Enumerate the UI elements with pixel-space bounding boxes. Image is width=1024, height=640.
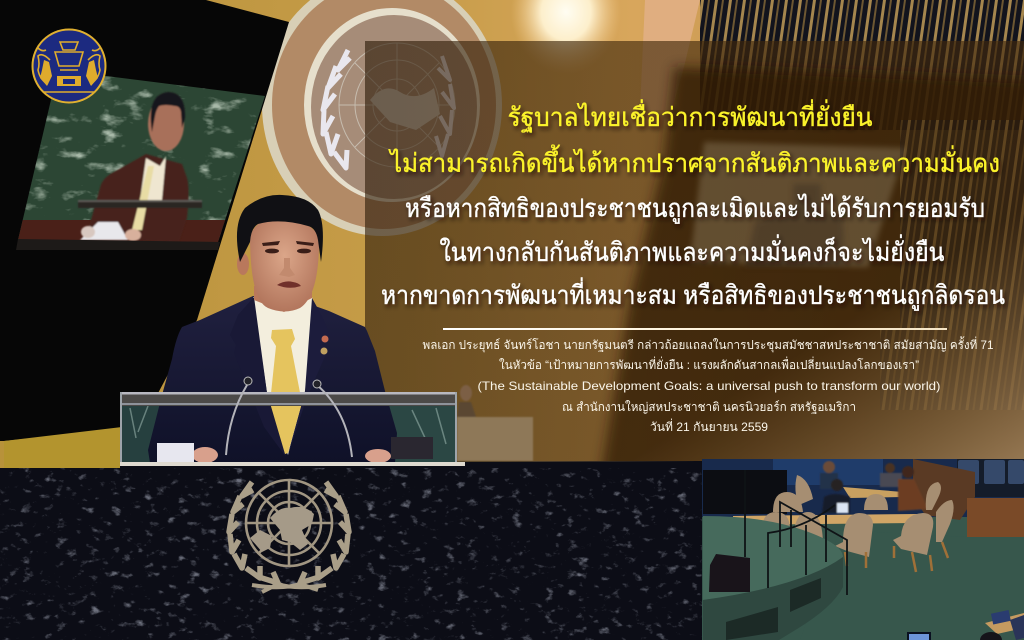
left laurel leaves xyxy=(323,50,350,168)
detail line 3: (The Sustainable Development Goals: a universal push to transform our world) xyxy=(478,379,940,393)
title line 4: ในทางกลับกันสันติภาพและความมั่นคงก็จะไม่ยั่งยืน xyxy=(440,234,945,267)
left lapel xyxy=(230,297,286,457)
rail highlight xyxy=(120,392,457,394)
microphones xyxy=(226,385,352,457)
hands xyxy=(192,447,218,463)
divider rule xyxy=(443,328,947,330)
detail text block xyxy=(422,336,994,434)
wreath stems xyxy=(252,584,326,592)
chairs front row xyxy=(762,500,954,557)
ear xyxy=(237,253,249,275)
platform side xyxy=(703,557,843,640)
lectern glass behind speaker xyxy=(121,404,456,463)
on-screen speaker xyxy=(78,92,202,242)
main table xyxy=(733,514,917,525)
main speaker xyxy=(148,195,397,463)
wooden partition xyxy=(913,459,975,520)
pilaster xyxy=(640,0,700,110)
neck xyxy=(254,286,312,312)
emblem: UN on lectern xyxy=(229,480,349,592)
reflected figure xyxy=(745,184,845,267)
tie xyxy=(270,329,302,454)
emblem: UN relief on wall xyxy=(262,0,502,236)
delegates xyxy=(820,461,928,511)
vents on platform xyxy=(726,607,778,640)
dark inset hall box xyxy=(600,67,1024,480)
lower gold wall strip xyxy=(4,427,122,468)
seated delegate behind podium xyxy=(457,385,533,461)
top rail xyxy=(120,392,457,406)
rail xyxy=(745,470,847,595)
detail line 5: วันที่ 21 กันยายน 2559 xyxy=(650,418,768,434)
detail line 1: พลเอก ประยุทธ์ จันทร์โอชา นายกรัฐมนตรี กล่าวถ้อยแถลงในการประชุมสมัชชาสหประชาชาติ สมัยสามัญ ครั้งที่ 71 xyxy=(422,336,994,353)
lower right slat reflection xyxy=(880,330,1024,410)
podium: glass lectern xyxy=(120,377,465,466)
right wreath leaves xyxy=(300,482,349,583)
circular platform top xyxy=(703,516,843,600)
seal ornament xyxy=(38,42,100,92)
suit xyxy=(148,296,397,463)
panel: on-screen photograph of speaker xyxy=(18,76,265,242)
haze xyxy=(639,214,1024,461)
detail line 4: ณ สำนักงานใหญ่สหประชาชาติ นครนิวยอร์ก สหรัฐอเมริกา xyxy=(562,400,856,414)
green marble texture xyxy=(25,76,256,236)
blue seats xyxy=(957,459,1024,497)
wood box xyxy=(967,498,1024,537)
chairs back row xyxy=(773,475,941,512)
upper wall xyxy=(702,459,1024,517)
upper table xyxy=(843,487,903,498)
brows, eyes, mouth xyxy=(262,241,314,253)
dark equipment xyxy=(703,470,787,514)
monitors and near desks xyxy=(907,610,1024,640)
left wreath leaves xyxy=(229,482,278,583)
shirt xyxy=(253,297,314,455)
reflected screen in panel xyxy=(690,142,906,267)
side edge xyxy=(120,392,122,464)
face xyxy=(250,216,319,312)
centre delegate xyxy=(822,479,850,513)
background: gold wall xyxy=(0,0,1024,480)
podium box xyxy=(709,554,750,592)
chair legs xyxy=(845,542,948,572)
panel: translucent text backdrop xyxy=(365,41,1024,480)
globe xyxy=(246,480,332,566)
right lapel xyxy=(288,298,330,454)
marble lectern base xyxy=(0,461,703,640)
right laurel leaves xyxy=(436,56,454,156)
wooden slat wall xyxy=(700,0,1024,130)
title line 1: รัฐบาลไทยเชื่อว่าการพัฒนาที่ยั่งยืน xyxy=(508,99,873,133)
floor xyxy=(800,530,1024,640)
bright light spot on wall xyxy=(511,0,621,74)
right slat reflection xyxy=(900,120,1024,330)
lapel pins xyxy=(322,336,328,342)
title block xyxy=(381,99,1005,311)
continents xyxy=(250,507,314,552)
photo: General Assembly floor xyxy=(702,459,1024,640)
hair xyxy=(237,195,323,262)
big screen frame (black) xyxy=(0,0,289,441)
paper xyxy=(157,443,194,462)
bar beneath screen xyxy=(16,239,220,250)
base ledge xyxy=(120,462,465,466)
dark red strip xyxy=(18,220,225,242)
device xyxy=(391,437,433,459)
emblem: Thai Government seal xyxy=(32,28,106,104)
detail line 2: ในหัวข้อ “เป้าหมายการพัฒนาที่ยั่งยืน : แรงผลักดันสากลเพื่อเปลี่ยนแปลงโลกของเรา” xyxy=(499,356,919,372)
